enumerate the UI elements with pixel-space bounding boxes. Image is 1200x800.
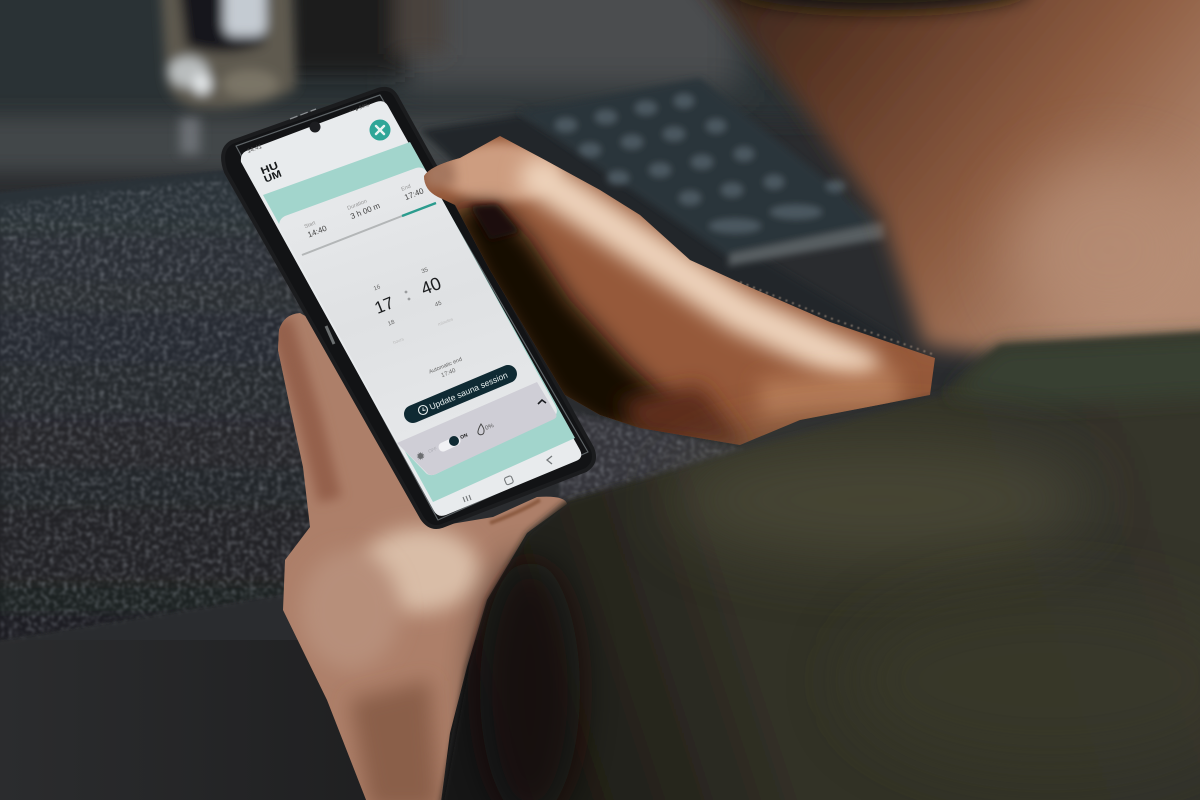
front camera <box>310 122 320 132</box>
time wheel: hours <box>367 282 408 347</box>
tab: start: Start <box>304 220 317 230</box>
tab progress line <box>302 203 436 255</box>
time wheel: hours: 18 <box>387 319 396 328</box>
dark object behind the glass <box>285 0 445 75</box>
automatic end label: 17:40 <box>441 368 457 379</box>
blurred keyboard <box>518 78 885 266</box>
tab: end: 17:40 <box>403 186 426 202</box>
time wheel: hours: 16 <box>373 284 382 292</box>
automatic end label: Automatic end <box>428 357 463 375</box>
teal background band <box>263 142 575 502</box>
phone <box>223 89 594 527</box>
navigation bar icons <box>463 456 552 502</box>
tab: end <box>401 180 426 202</box>
toggle <box>443 441 456 447</box>
time wheel: hours: hours <box>392 336 405 345</box>
on label: ON <box>460 432 469 441</box>
chevron <box>538 400 546 404</box>
time wheel: minutes: 40 <box>418 273 444 299</box>
HUUM logo: HU <box>259 160 280 177</box>
humidity value: 0% <box>485 423 495 432</box>
person's head, blurred foreground <box>690 0 1200 355</box>
HUUM logo <box>259 160 283 186</box>
tab: start: 14:40 <box>306 223 329 240</box>
left hand holding the phone <box>278 313 567 800</box>
time wheel: minutes: minutes <box>437 316 454 327</box>
status bar: time: 14:41 <box>247 144 263 155</box>
hinge notch <box>326 326 334 344</box>
phone body <box>223 89 594 527</box>
felt desk mat <box>0 160 760 650</box>
update session button: Update sauna session <box>428 370 509 412</box>
tab: duration: 3 h 00 m <box>349 201 382 221</box>
drinking glass <box>160 0 296 109</box>
status bar: icons: ▪ ◦ ▴ 94%▪ <box>349 102 372 115</box>
speaker slits <box>290 109 316 119</box>
humidity drop <box>478 424 484 435</box>
right hand and thumb over the phone <box>424 136 935 445</box>
off label: OFF <box>428 446 438 454</box>
HUUM logo: UM <box>263 169 283 186</box>
time wheel: hours: 17 <box>372 293 397 318</box>
time wheel: minutes: 45 <box>434 300 443 309</box>
time wheel colon <box>405 291 410 300</box>
screen <box>241 101 581 516</box>
person's olive shirt, blurred foreground <box>440 330 1200 800</box>
close button <box>370 120 390 140</box>
collapsed controls sheet <box>397 382 556 475</box>
time wheel: minutes: 35 <box>421 267 430 275</box>
wrist hair highlight <box>740 282 935 355</box>
white session card <box>279 168 557 475</box>
automatic end label <box>428 357 466 383</box>
sun icon: ✹ <box>416 451 425 463</box>
tab: duration <box>347 195 382 221</box>
tab: end: End <box>401 184 412 193</box>
time wheel: minutes <box>415 265 456 328</box>
tab: start <box>304 217 329 240</box>
tab: duration: Duration <box>347 199 368 212</box>
